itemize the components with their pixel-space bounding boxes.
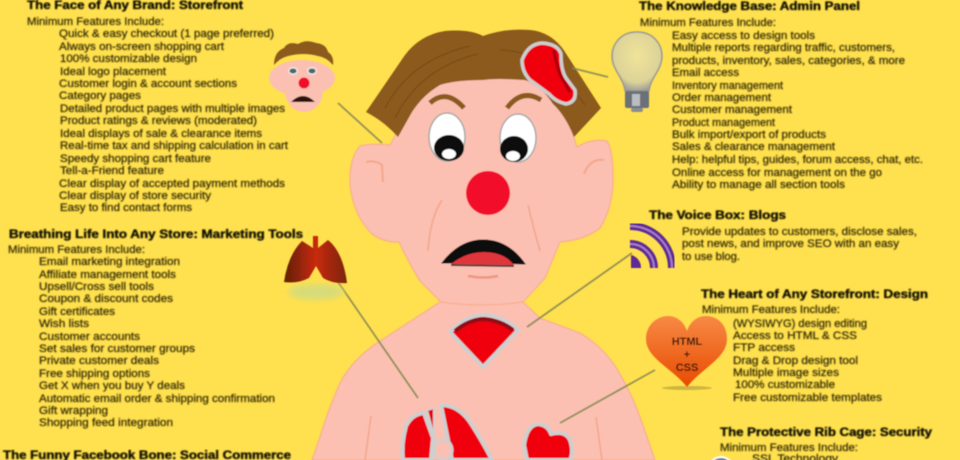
text block: security	[720, 427, 933, 460]
text block: marketing tools: Minimum Features Include:	[8, 244, 145, 256]
text block: admin panel: Ability to manage all section tools	[672, 179, 846, 191]
heart wound	[524, 424, 572, 460]
text block: marketing tools: Free shipping options	[39, 368, 151, 380]
text block: admin panel: Easy access to design tools	[672, 30, 816, 42]
icon: security badge	[709, 457, 733, 460]
text block: blogs	[649, 210, 917, 263]
text block: admin panel: The Knowledge Base: Admin Panel	[639, 1, 860, 13]
text block: storefront: Category pages	[59, 90, 142, 102]
text block: storefront: The Face of Any Brand: Storefront	[27, 0, 243, 12]
icon: lungs	[284, 236, 347, 300]
nose	[466, 171, 510, 215]
text block: storefront: Ideal logo placement	[60, 66, 166, 78]
text block: blogs: to use blog.	[682, 251, 740, 263]
brain wound	[522, 43, 575, 104]
text block: admin panel: Bulk import/export of products	[672, 129, 827, 141]
text block: security: Minimum Features Include:	[720, 442, 858, 454]
text block: marketing tools: Email marketing integration	[39, 256, 180, 268]
torso	[312, 302, 655, 460]
connector lines	[338, 68, 655, 423]
icon: HTML + CSS heart: +	[684, 349, 690, 361]
text block: storefront: Clear display of accepted payment methods	[59, 178, 286, 190]
text block: admin panel: Sales & clearance management	[672, 141, 835, 153]
text block: marketing tools: Customer accounts	[39, 331, 141, 343]
wrinkles	[428, 200, 540, 251]
text block: admin panel: Minimum Features Include:	[640, 17, 776, 29]
ear details	[366, 161, 383, 182]
text block: design: 100% customizable	[735, 379, 835, 391]
text block: admin panel: Online access for management on the go	[672, 167, 882, 179]
text block: marketing tools: Private customer deals	[39, 355, 160, 367]
text block: blogs: The Voice Box: Blogs	[649, 210, 786, 222]
head	[350, 30, 613, 305]
text block: admin panel: Help: helpful tips, guides, forum access, chat, etc.	[672, 154, 923, 166]
lungs wound	[402, 405, 492, 460]
text block: storefront: Tell-a-Friend feature	[60, 165, 164, 177]
text block: marketing tools: Set sales for customer groups	[39, 343, 196, 355]
text block: blogs: post news, and improve SEO with an easy	[682, 238, 900, 250]
text block: storefront: Real-time tax and shipping calculation in cart	[60, 140, 288, 152]
text block: storefront: Easy to find contact forms	[60, 202, 193, 214]
neck wound	[450, 315, 518, 367]
text block: design: (WYSIWYG) design editing	[733, 318, 867, 330]
text block: design: Drag & Drop design tool	[733, 355, 858, 367]
text block: design: FTP access	[733, 342, 796, 354]
text block: storefront: Customer login & account sections	[59, 78, 238, 90]
text block: marketing tools: Wish lists	[39, 318, 90, 330]
text block: admin panel: Customer management	[672, 104, 792, 116]
text block: admin panel: products, inventory, sales, categories, & more	[672, 55, 905, 67]
text block: storefront: Quick & easy checkout (1 page preferred)	[59, 28, 274, 40]
text block: design	[701, 289, 928, 404]
text block: security: The Protective Rib Cage: Security	[720, 427, 933, 439]
text block: design: The Heart of Any Storefront: Design	[701, 289, 928, 301]
text block: marketing tools: Shopping feed integration	[39, 417, 173, 429]
text block: admin panel: Order management	[672, 92, 771, 104]
hair	[366, 30, 601, 137]
text block: marketing tools: Get X when you buy Y deals	[39, 380, 186, 392]
text block: marketing tools: Gift wrapping	[39, 405, 108, 417]
icon: small face	[269, 41, 335, 112]
mouth	[442, 240, 525, 278]
torso creases	[365, 416, 602, 460]
text block: design: Access to HTML & CSS	[733, 330, 857, 342]
text block: storefront: Minimum Features Include:	[27, 16, 164, 28]
text block: storefront: Clear display of store security	[59, 190, 212, 202]
icon: HTML + CSS heart: HTML	[672, 336, 703, 348]
eyebrows	[430, 96, 541, 108]
cartoon body	[312, 30, 655, 460]
text block: marketing tools: Upsell/Cross sell tools	[39, 281, 155, 293]
text block: marketing tools: Automatic email order & shipping confirmation	[39, 393, 275, 405]
text block: marketing tools: Gift certificates	[39, 306, 116, 318]
text block: storefront: Ideal displays of sale & clearance items	[60, 128, 263, 140]
text block: storefront: 100% customizable design	[60, 53, 197, 65]
text block: storefront: Always on-screen shopping cart	[59, 41, 224, 53]
text block: design: Free customizable templates	[733, 392, 883, 404]
text block: blogs: Provide updates to customers, disclose sales,	[682, 226, 917, 238]
text block: design: Multiple image sizes	[733, 367, 840, 379]
icon: HTML + CSS heart	[646, 316, 727, 390]
left eye	[429, 113, 465, 161]
text block: marketing tools: Coupon & discount codes	[39, 293, 174, 305]
text block: admin panel: Product management	[672, 117, 775, 129]
text block: marketing tools	[8, 229, 303, 429]
icon: RSS feed	[630, 226, 672, 268]
text block: storefront: Speedy shopping cart feature	[60, 153, 211, 165]
text block: marketing tools: Affiliate management tools	[39, 269, 177, 281]
text block: admin panel	[639, 1, 923, 191]
text block: storefront: Product ratings & reviews (moderated)	[60, 115, 257, 127]
text block: storefront: Detailed product pages with multiple images	[60, 103, 286, 115]
text block: admin panel: Email access	[672, 67, 740, 79]
text block: marketing tools: Breathing Life Into Any Store: Marketing Tools	[9, 229, 303, 241]
text block: admin panel: Inventory management	[672, 80, 783, 92]
text block: admin panel: Multiple reports regarding traffic, customers,	[672, 42, 895, 54]
right eye	[500, 114, 536, 162]
icon: HTML + CSS heart: CSS	[676, 362, 698, 374]
text block: storefront	[27, 0, 288, 214]
text block: design: Minimum Features Include:	[702, 304, 840, 316]
icon: light bulb	[612, 32, 662, 112]
